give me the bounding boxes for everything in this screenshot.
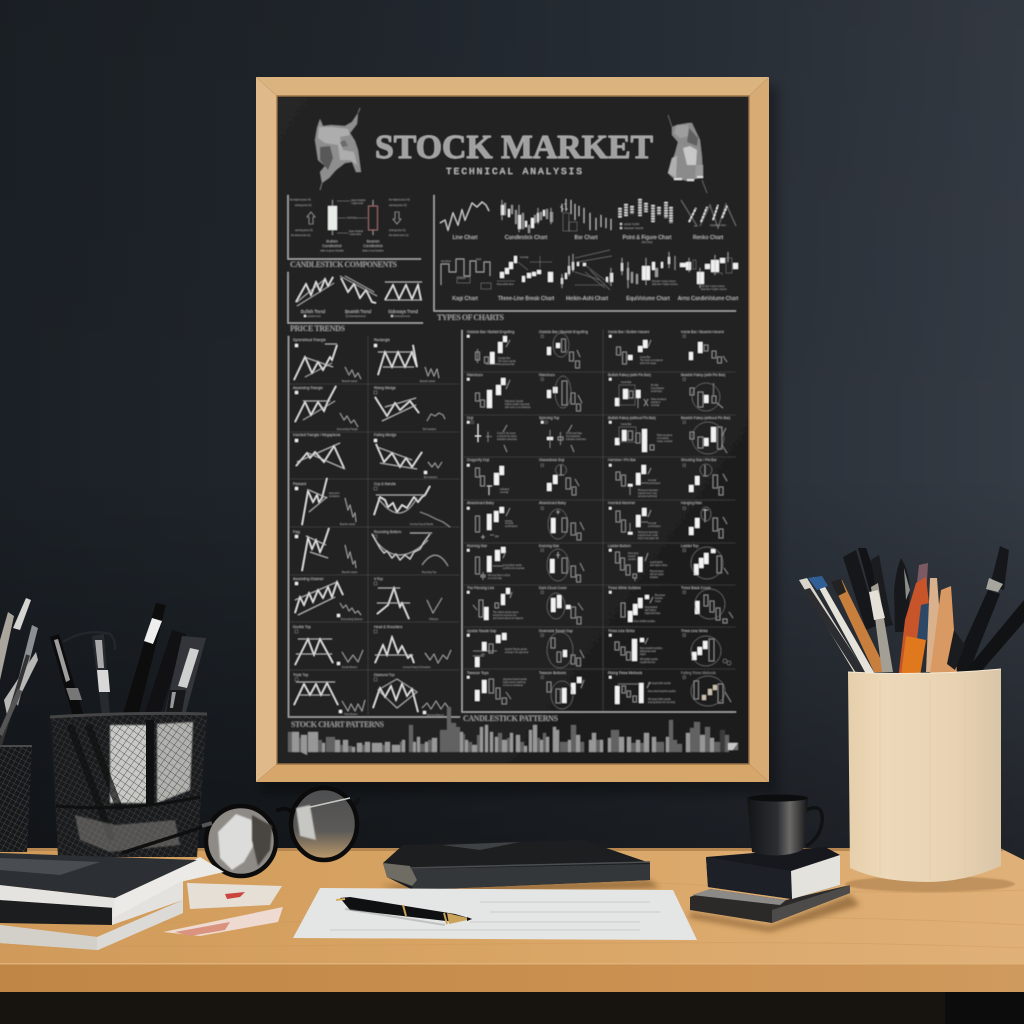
line chart bbox=[440, 202, 489, 241]
pattern: v-top: V-Bottom bbox=[429, 618, 439, 621]
bearish trend bbox=[340, 276, 377, 318]
heading: candlestick components: CANDLESTICK COMPONENTS bbox=[290, 260, 398, 269]
pattern: abandoned baby bearish bbox=[539, 501, 584, 540]
pattern: gravestone doji bbox=[539, 458, 579, 495]
equivolume chart bbox=[621, 252, 678, 302]
pattern: rounding bottom: Rounding Bottom bbox=[374, 530, 401, 534]
pattern: tweezer tops: Tweezer Tops bbox=[467, 671, 489, 675]
pattern: inverted triangle megaphone bbox=[293, 433, 345, 469]
pattern: the piercing line: below the previous low bbox=[493, 614, 517, 617]
pattern: ascending channel: Ascending Channel bbox=[293, 577, 324, 581]
pattern: ladder bottom: three long bbox=[628, 552, 639, 555]
pattern: abandoned baby bullish: gap bbox=[495, 536, 500, 538]
pattern: bullish fakey with pin bar: Pin Bar bbox=[651, 384, 659, 387]
pattern: triple top bbox=[293, 673, 365, 716]
pattern: ascending triangle: Descending Triangle bbox=[337, 428, 359, 431]
pattern: outside bar bullish engulfing: Outside Bar bbox=[498, 357, 510, 360]
pattern: three line strike bullish: three bearish candles, bbox=[640, 647, 663, 650]
pattern: inverted hammer: reversal bbox=[648, 522, 657, 525]
pattern: upside tasuki gap bbox=[467, 629, 529, 667]
pattern: falling wedge: Falling Wedge bbox=[374, 433, 396, 437]
renko chart: equal-box sizes bbox=[710, 225, 727, 227]
pattern: the piercing line: and closes above its midpoint bbox=[493, 617, 523, 620]
pattern: ascending triangle: Ascending Triangle bbox=[293, 386, 323, 390]
pattern: ascending channel: Descending Channel bbox=[341, 619, 363, 621]
pattern: marubozu bearish: Marubozu bbox=[539, 373, 555, 377]
point and figure chart: (flat Chart) bbox=[642, 241, 653, 244]
mug bbox=[747, 794, 822, 856]
pattern: morning star: long bullish candle bbox=[503, 565, 523, 567]
pattern: the piercing line bbox=[467, 586, 523, 620]
pattern: ascending triangle bbox=[293, 386, 359, 431]
wooden pencil cup bbox=[845, 669, 1015, 892]
pattern: hammer pin bar: support level, long bbox=[638, 492, 657, 495]
pattern: morning star: Morning Star is a Doji bbox=[488, 574, 510, 577]
pattern: doji: Doji bbox=[467, 416, 473, 420]
pattern: morning star: Morning Star bbox=[467, 544, 488, 548]
pattern: ladder bottom: shadow bbox=[650, 577, 658, 579]
pattern: ladder bottom: with higher close bbox=[650, 564, 668, 567]
left wire basket partial bbox=[0, 746, 32, 852]
pattern: outside bar bearish engulfing bbox=[539, 330, 588, 368]
pattern: rectangle bbox=[374, 338, 439, 383]
bullish candlestick: the highest price (H) bbox=[290, 198, 311, 202]
pattern: ladder top bbox=[681, 544, 728, 579]
pattern: bullish fakey without pin bar: of a trading bbox=[657, 437, 669, 440]
pattern: three line strike bullish: engulfs the trio bbox=[640, 661, 656, 664]
bullish trend bbox=[296, 277, 334, 318]
subtitle: TECHNICAL ANALYSIS bbox=[446, 166, 582, 177]
pattern: inside bar bullish harami: Inside Bar bbox=[640, 356, 651, 359]
pattern: hammer pin bar: reversal bbox=[648, 479, 657, 482]
pattern: inside bar bearish harami: Inside Bar / Bearish Harami bbox=[681, 330, 724, 334]
pattern: evening star: Evening Star bbox=[539, 544, 560, 548]
pattern: dragonfly doji: Indicates bbox=[500, 488, 510, 491]
line chart: Line Chart bbox=[453, 235, 478, 241]
sideways trend: horizontal trend bbox=[394, 315, 411, 318]
pattern: three line strike bullish: falling lows and bbox=[640, 651, 656, 653]
bearish trend: Bearish Trend bbox=[345, 309, 372, 314]
heading: types of charts: TYPES OF CHARTS bbox=[437, 313, 505, 322]
bullish candlestick: closing price (C) bbox=[295, 204, 312, 207]
pattern: doji bbox=[467, 416, 518, 452]
pattern: inside bar bullish harami bbox=[608, 330, 663, 365]
books under mug bbox=[690, 847, 850, 923]
heikin-ashi chart bbox=[561, 250, 613, 302]
heading: candlestick patterns: CANDLESTICK PATTERNS bbox=[463, 714, 559, 723]
pattern: three white soldiers: with higher bbox=[645, 609, 656, 612]
pattern: three white soldiers bbox=[608, 586, 666, 623]
pattern: ladder bottom: bearish bbox=[628, 555, 636, 558]
pattern: morning star: confirms the reversal bbox=[503, 567, 525, 570]
pattern: tweezer tops bbox=[467, 671, 527, 704]
icon: bear bbox=[668, 115, 707, 193]
small paper stack bbox=[163, 883, 283, 936]
pattern: inverted hammer bbox=[608, 501, 661, 540]
pattern: doji: indicates indecision bbox=[497, 438, 518, 441]
candlestick chart: Candlestick Chart bbox=[505, 235, 548, 241]
wire mesh basket bbox=[50, 713, 207, 857]
pens in left basket bbox=[0, 598, 38, 745]
bullish candlestick: Candlestick bbox=[322, 244, 342, 248]
pattern: bearish fakey without pin bar bbox=[681, 416, 730, 454]
stack of books left bbox=[0, 853, 224, 950]
panel: candlestick components: / upper wick bbox=[351, 202, 364, 205]
pattern: dark cloud cover: Dark Cloud Cover bbox=[539, 586, 568, 590]
pattern: diamond top: Diamond Top bbox=[374, 673, 395, 677]
pattern: symmetrical triangle bbox=[293, 338, 361, 383]
pattern: tweezer tops: highs nearly matching bbox=[503, 681, 526, 684]
pattern: three line strike bullish: 4th bullish candle bbox=[640, 658, 658, 661]
kagi chart bbox=[441, 258, 491, 302]
skyline bar decoration bbox=[288, 707, 738, 755]
eyeglasses bbox=[122, 788, 359, 876]
pattern: bearish fakey with pin bar: Bearish Fakey (with Pin Bar) bbox=[681, 373, 725, 377]
pattern: abandoned baby bullish bbox=[467, 501, 518, 539]
pattern: spinning top bbox=[539, 416, 587, 452]
three-line break chart: reversal bbox=[520, 256, 529, 259]
bearish candlestick: Bearish bbox=[367, 240, 379, 244]
pattern: ladder bottom: candles bbox=[628, 559, 637, 561]
pattern: doji: O and C the same bbox=[497, 432, 516, 435]
heading: price trends: PRICE TRENDS bbox=[290, 324, 346, 333]
wooden desk bbox=[0, 848, 1024, 1024]
pattern: inverted hammer: Hitting an important bbox=[638, 531, 658, 534]
pattern: upside tasuki gap: Upside Tasuki Gap bbox=[467, 629, 496, 633]
kagi chart: Kagi Chart bbox=[452, 296, 478, 302]
pattern: upside tasuki gap: bearish Tasuki candle bbox=[505, 648, 528, 651]
pattern: dark cloud cover bbox=[539, 586, 583, 624]
pattern: pennant: Pennant bbox=[293, 482, 306, 486]
three-line break chart bbox=[497, 256, 555, 302]
kagi chart: waist bbox=[476, 258, 482, 261]
pattern: rising three methods bbox=[608, 671, 677, 704]
arms candlevolume chart bbox=[678, 252, 739, 302]
pattern: three white soldiers: three bullish candles bbox=[634, 620, 656, 623]
pattern: bullish fakey with pin bar: False breakout bbox=[651, 398, 667, 401]
pattern: inside bar bullish harami: within the range bbox=[640, 362, 657, 365]
bearish trend: downward trend bbox=[349, 315, 366, 318]
pattern: bullish fakey with pin bar: Bullish Fakey (with Pin Bar) bbox=[608, 373, 651, 377]
pattern: diamond top bbox=[373, 673, 448, 717]
pattern: hammer pin bar: Hitting an important bbox=[638, 489, 658, 492]
pattern: pennant bbox=[293, 478, 356, 526]
pattern: inside bar bullish harami: The body is contained bbox=[640, 359, 663, 362]
bearish candlestick bbox=[362, 198, 410, 252]
pattern: outside bar bullish engulfing: the previous bar bbox=[498, 363, 515, 366]
pattern: rising three methods: closing above the 1st body bbox=[648, 701, 676, 704]
pattern: flag: Flag bbox=[293, 530, 300, 534]
sideways trend: Sideways Trend bbox=[388, 309, 419, 314]
pattern: pennant: resistance bbox=[329, 495, 340, 498]
pens in pencil cup bbox=[799, 546, 1024, 680]
pattern: hammer pin bar: Hammer / Pin Bar bbox=[608, 458, 637, 462]
bullish candlestick: Bullish bbox=[326, 240, 338, 244]
poster bbox=[278, 97, 748, 763]
bullish trend: Bullish Trend bbox=[301, 309, 326, 314]
pattern: double top bbox=[293, 625, 363, 669]
pattern: bullish fakey with pin bar: Inside Bar bbox=[621, 381, 632, 384]
pattern: bullish fakey with pin bar: signals a bbox=[651, 402, 661, 404]
pattern: pennant: Bearish variant bbox=[340, 523, 356, 526]
bullish candlestick bbox=[290, 198, 345, 252]
pattern: three white soldiers: move bbox=[655, 601, 661, 603]
icon: fountain pen bbox=[336, 897, 472, 925]
pattern: hammer pin bar: tail and small body bbox=[638, 495, 658, 498]
pens in main wire basket bbox=[50, 603, 206, 717]
pattern: upside tasuki gap: closing in the gap area bbox=[505, 651, 529, 654]
bearish candlestick: Candlestick bbox=[363, 244, 383, 248]
sheet of paper with pen bbox=[293, 888, 697, 940]
sideways trend bbox=[385, 282, 422, 318]
bearish candlestick: black or red Candles bbox=[362, 250, 384, 252]
pattern: rectangle: Bearish variant bbox=[420, 380, 436, 383]
panel: stock chart patterns bbox=[288, 336, 460, 717]
panel: candlestick components: / lower wick bbox=[349, 233, 362, 236]
pattern: ladder bottom: Pierced open bbox=[650, 570, 664, 573]
pattern: inverted hammer: body, long upper tail bbox=[638, 537, 659, 540]
pattern: abandoned baby bullish: confirmation bbox=[505, 525, 518, 528]
pattern: tweezer tops: to form a resistance bbox=[503, 684, 524, 687]
pattern: cup and handle bbox=[374, 482, 450, 527]
pattern: head and shoulders: Inverted Head & Shoulders bbox=[403, 666, 431, 669]
pattern: bullish fakey without pin bar bbox=[608, 416, 673, 452]
pattern: symmetrical triangle: Symmetrical Triangle bbox=[293, 338, 326, 342]
pattern: triple top: Triple Top bbox=[293, 673, 308, 677]
pattern: rising three methods: 1st long bullish candle bbox=[648, 682, 671, 685]
pattern: outside bar bullish engulfing bbox=[467, 330, 516, 366]
pattern: tweezer tops: opposite-bodied candle bbox=[503, 678, 527, 681]
three-line break chart: Three-Line Break Chart bbox=[498, 296, 555, 302]
pattern: hanging man bbox=[681, 501, 727, 538]
pattern: hammer pin bar bbox=[608, 458, 661, 498]
pattern: flag: Bearish variant bbox=[342, 571, 358, 574]
pattern: ladder bottom: Ladder Bottom bbox=[608, 544, 631, 548]
pattern: doji: or almost the same, bbox=[497, 435, 518, 438]
pattern: shooting star pin bar bbox=[681, 458, 727, 495]
pattern: evening star bbox=[539, 544, 584, 582]
pattern: bearish fakey without pin bar: Bearish Fakey (without Pin Bar) bbox=[681, 416, 730, 420]
pattern: ladder bottom: with an upper bbox=[650, 573, 664, 576]
pattern: bullish fakey without pin bar: False breakout bbox=[657, 434, 673, 437]
pattern: hanging man: Hanging Man bbox=[681, 501, 702, 505]
pattern: outside bar bullish engulfing: Outside Bar / Bullish Engulfing bbox=[467, 330, 514, 334]
pattern: spinning top: Small real body, bbox=[566, 432, 583, 435]
bullish candlestick: the lowest price (L) bbox=[291, 234, 311, 237]
pattern: falling three methods bbox=[681, 671, 731, 706]
panel: candlestick components: real body bbox=[347, 216, 357, 220]
pattern: spinning top: long shadows, bbox=[566, 436, 581, 438]
pattern: spinning top: Spinning Top bbox=[539, 416, 559, 420]
pattern: rounding bottom: Rounding Top bbox=[422, 572, 437, 574]
pattern: three line strike bearish bbox=[681, 629, 731, 666]
pattern: marubozu bullish: bullish candle long body bbox=[505, 404, 530, 406]
pattern: diamond top: Diamond Bottom bbox=[427, 714, 444, 717]
pattern: rising wedge bbox=[374, 386, 445, 431]
pattern: bullish fakey without pin bar: Inside Bar bbox=[621, 423, 632, 426]
equivolume chart: EquiVolume Chart bbox=[626, 296, 670, 302]
pattern: marubozu bullish: Marubozu Candle bbox=[505, 400, 524, 403]
pattern: abandoned baby bullish: reversal bbox=[505, 522, 514, 525]
pattern: inverted hammer: confirmation bbox=[648, 525, 661, 528]
panel: candlestick components: upper shadow bbox=[351, 199, 366, 202]
pattern: three black crows: Three Black Crows bbox=[681, 586, 711, 590]
pattern: bearish fakey with pin bar bbox=[681, 373, 725, 411]
pattern: inverted hammer: support level, small bbox=[638, 534, 658, 537]
pattern: cup and handle: Inverted Cup & Handle bbox=[410, 523, 434, 526]
arms candlevolume chart: thin bar = lower volume bbox=[701, 285, 726, 288]
pattern: pennant: short-term bbox=[329, 492, 340, 495]
bearish candlestick: the lowest price (L) bbox=[389, 234, 409, 237]
black wallet notebook bbox=[383, 840, 650, 890]
pattern: triple top: Triple Bottom bbox=[344, 713, 358, 716]
renko chart: Renko Chart bbox=[693, 235, 724, 241]
pattern: marubozu bearish bbox=[539, 373, 582, 411]
pattern: rounding bottom bbox=[372, 530, 448, 574]
pattern: three white soldiers: long-bodied bbox=[645, 607, 658, 609]
icon: bull bbox=[315, 108, 361, 190]
pattern: ascending channel bbox=[293, 577, 363, 621]
bullish candlestick: white or green Candles bbox=[320, 250, 345, 252]
pattern: rising three methods: three short bearish candles bbox=[648, 690, 677, 693]
pattern: upside tasuki gap: gap bbox=[481, 654, 486, 656]
pattern: gravestone doji: Gravestone Doji bbox=[539, 458, 564, 462]
pattern: morning star: or a tiny body bbox=[488, 577, 503, 580]
arms candlevolume chart: wide bar = higher volume bbox=[701, 288, 727, 291]
panel: types of charts bbox=[434, 195, 739, 311]
pattern: dragonfly doji: reversal bbox=[500, 491, 509, 494]
pattern: v-top: V-Top bbox=[374, 577, 383, 581]
pattern: inside bar bullish harami: Inside Bar / Bullish Harami bbox=[608, 330, 649, 334]
pattern: tweezer bottoms: Tweezer Bottoms bbox=[539, 671, 566, 675]
pattern: bullish fakey with pin bar: reversal bbox=[651, 404, 660, 407]
heikin-ashi chart: Heikin-Ashi Chart bbox=[566, 296, 608, 302]
pattern: head and shoulders: Head & Shoulders bbox=[374, 625, 403, 629]
renko chart bbox=[681, 200, 736, 241]
pattern: three line strike bullish: Three Line Strike bbox=[608, 629, 635, 633]
pattern: rising three methods: Rising Three Methods bbox=[608, 671, 642, 675]
arms candlevolume chart: Arms CandleVolume Chart bbox=[678, 296, 739, 302]
point and figure chart: upside / bullish bbox=[624, 224, 640, 226]
pattern: abandoned baby bullish: Abandoned Baby bbox=[467, 501, 494, 505]
bullish trend: upward trend bbox=[307, 315, 321, 318]
wooden picture frame bbox=[256, 77, 769, 782]
pattern: tweezer bottoms bbox=[539, 671, 584, 709]
panel: price trends bbox=[288, 272, 423, 323]
pattern: symmetrical triangle: Bearish variant bbox=[342, 380, 358, 383]
pattern: v-top bbox=[374, 577, 442, 621]
equivolume chart: thin bar = lower volume bbox=[652, 280, 677, 283]
pattern: inside bar bearish harami bbox=[681, 330, 727, 363]
pattern: dragonfly doji bbox=[467, 458, 510, 495]
pattern: outside bar bullish engulfing: The body engulfs bbox=[498, 361, 516, 363]
pattern: marubozu bullish: with none or no shadows bbox=[505, 406, 531, 409]
title: STOCK MARKET bbox=[375, 129, 653, 166]
pattern: falling wedge bbox=[374, 433, 442, 479]
bullish candlestick: opening price (O) bbox=[295, 229, 313, 232]
pattern: shooting star pin bar: Shooting Star / Pin Bar bbox=[681, 458, 717, 462]
pattern: ladder bottom bbox=[608, 544, 668, 581]
pattern: falling wedge: Bull variation bbox=[424, 476, 438, 479]
bearish candlestick: the highest price (H) bbox=[389, 198, 410, 202]
pattern: bullish fakey without pin bar: range, reversal bbox=[657, 440, 673, 443]
pattern: ladder top: Ladder Top bbox=[681, 544, 699, 548]
panel: candlestick components: lower shadow bbox=[349, 230, 363, 233]
point and figure chart bbox=[620, 199, 672, 244]
bar chart: Bar Chart bbox=[574, 235, 598, 241]
pattern: three line strike bullish bbox=[608, 629, 663, 664]
pattern: three line strike bearish: Three Line Strike bbox=[681, 629, 708, 633]
pattern: spinning top: indicates indecision bbox=[566, 438, 587, 441]
bar chart bbox=[560, 199, 611, 241]
pattern: three black crows bbox=[681, 586, 733, 623]
panel: candlestick components bbox=[288, 195, 421, 259]
pattern: hammer pin bar: confirmation bbox=[648, 482, 661, 485]
pattern: three white soldiers: bearish bbox=[655, 597, 663, 600]
pattern: double top: Double Top bbox=[293, 625, 311, 629]
pattern: three line strike bullish: highs bbox=[640, 654, 646, 656]
pattern: rising wedge: Bull variation bbox=[423, 428, 437, 431]
pattern: marubozu bullish: Marubozu bbox=[467, 373, 483, 377]
candlestick chart bbox=[501, 200, 553, 241]
pattern: the piercing line: The bullish candle opens bbox=[493, 612, 519, 614]
kagi chart: shoulders bbox=[441, 260, 452, 263]
pattern: morning star bbox=[467, 544, 525, 580]
pattern: rising three methods: 4th long bullish candle bbox=[648, 698, 671, 701]
pattern: marubozu bullish bbox=[467, 373, 531, 409]
pattern: bullish fakey with pin bar: long shadow bbox=[651, 388, 664, 390]
pattern: inverted triangle megaphone: Inverted Triangle / Megaphone bbox=[293, 433, 341, 437]
pattern: cup and handle: Cup & Handle bbox=[374, 482, 396, 486]
pattern: the piercing line: The Piercing Line bbox=[467, 586, 494, 590]
pattern: double top: Double Bottom bbox=[342, 666, 357, 669]
pattern: outside bar bearish engulfing: Outside Bar / Bearish Engulfing bbox=[539, 330, 588, 334]
pattern: head and shoulders bbox=[374, 625, 451, 669]
point and figure chart: Point & Figure Chart bbox=[623, 235, 672, 241]
point and figure chart: downside / bearish bbox=[624, 227, 644, 230]
pattern: three white soldiers: highs and lows bbox=[645, 613, 661, 615]
pattern: three white soldiers: Three White Soldiers bbox=[608, 586, 641, 590]
pattern: bullish fakey with pin bar: small body bbox=[651, 391, 663, 393]
pattern: falling three methods: Falling Three Methods bbox=[681, 671, 716, 675]
pattern: rectangle: Rectangle bbox=[374, 338, 390, 342]
pattern: rising wedge: Rising Wedge bbox=[374, 386, 396, 390]
pattern: ladder bottom: small bullish bbox=[650, 562, 663, 564]
pattern: downside tasuki gap bbox=[539, 629, 584, 668]
bearish candlestick: opening price (O) bbox=[389, 204, 407, 207]
pattern: downside tasuki gap: Downside Tasuki Gap bbox=[539, 629, 573, 633]
pattern: inverted hammer: Inverted Hammer bbox=[608, 501, 636, 505]
pattern: bullish fakey with pin bar bbox=[608, 373, 667, 408]
kagi chart: bearish bbox=[458, 277, 466, 280]
equivolume chart: wide bar = higher volume bbox=[652, 283, 678, 286]
pattern: three white soldiers: Reversed bbox=[655, 594, 666, 597]
heading: stock chart patterns: STOCK CHART PATTERNS bbox=[291, 720, 385, 729]
pattern: dragonfly doji: Dragonfly Doji bbox=[467, 458, 489, 462]
three-line break chart: three white lines bbox=[497, 283, 514, 286]
pattern: flag bbox=[293, 528, 358, 574]
bearish candlestick: closing price (C) bbox=[389, 229, 406, 232]
panel: candlestick patterns bbox=[462, 330, 736, 712]
pattern: abandoned baby bearish: Abandoned Baby bbox=[539, 501, 566, 505]
pattern: bullish fakey without pin bar: Bullish Fakey (without Pin Bar) bbox=[608, 416, 656, 420]
